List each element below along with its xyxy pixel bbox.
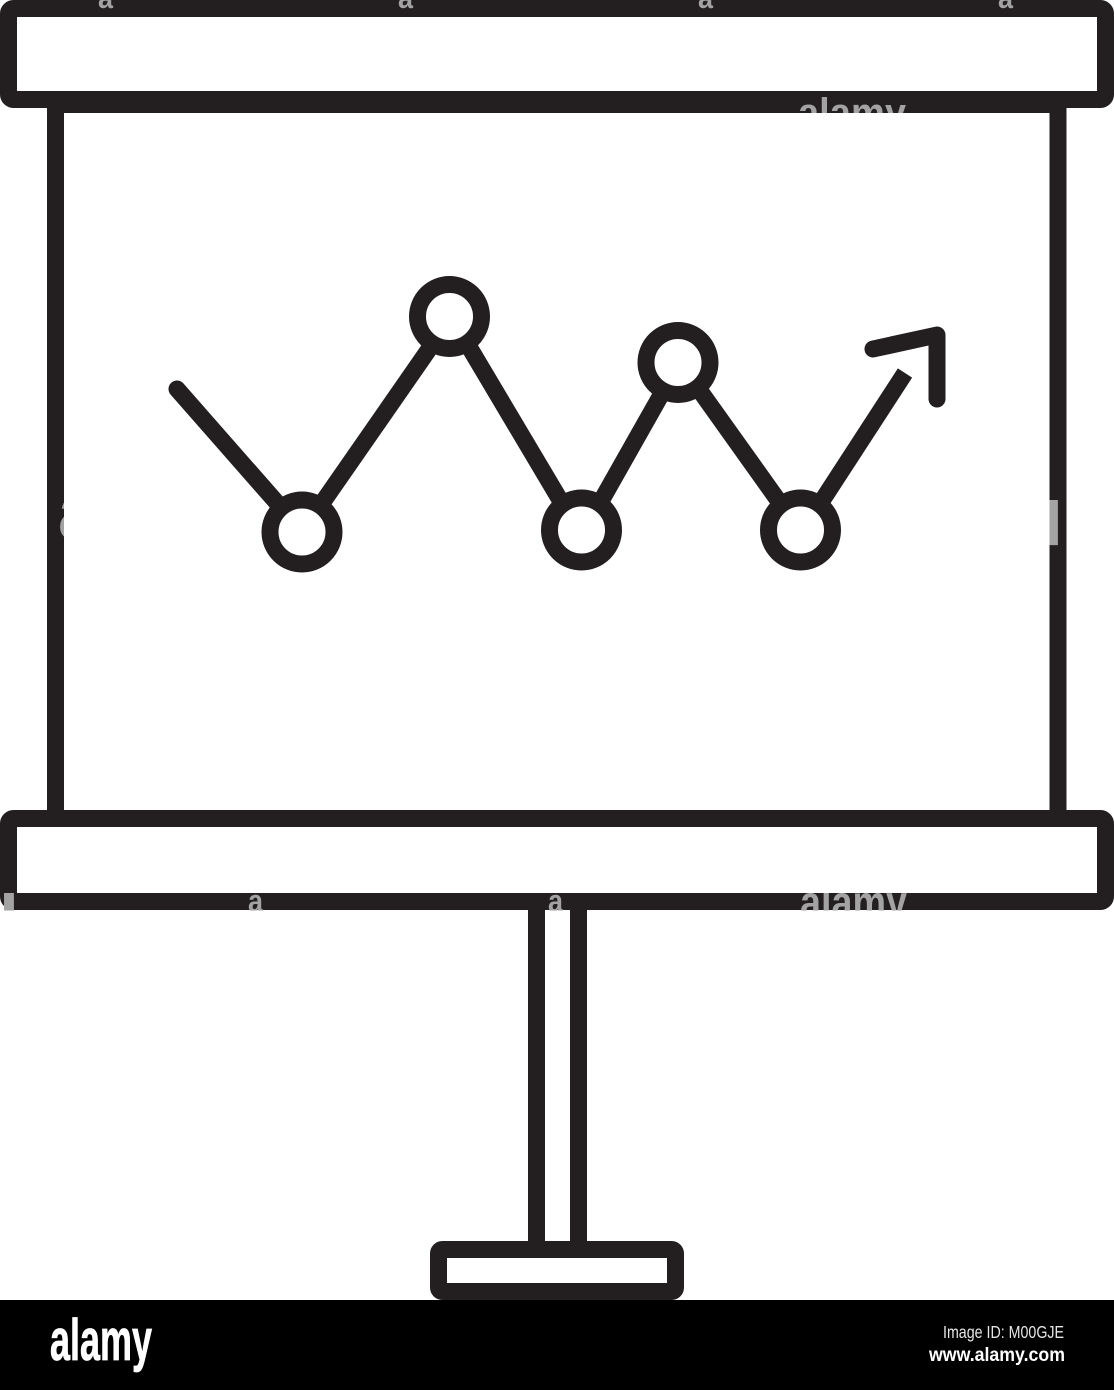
watermark remnants on the strokes: a	[248, 883, 263, 919]
data point circles	[270, 284, 832, 564]
top roller bar	[8, 8, 1106, 100]
footer image id: Image ID: M00GJE	[943, 1322, 1064, 1342]
watermark remnants on the strokes	[0, 0, 1064, 928]
watermark remnants on the strokes: a	[548, 883, 563, 919]
bottom roller bar	[8, 818, 1106, 902]
watermark remnants on the strokes: alamy	[800, 876, 907, 928]
watermark remnants on the strokes: a	[58, 467, 99, 555]
chart line segments	[177, 340, 905, 512]
line chart	[177, 284, 937, 564]
stand pole	[528, 905, 587, 1250]
footer band	[0, 1300, 1114, 1390]
watermark remnants on the strokes: alamy	[798, 91, 907, 135]
footer url: www.alamy.com	[928, 1345, 1065, 1366]
footer logo: alamy: alamy	[50, 1308, 152, 1373]
screen panel	[56, 104, 1058, 820]
arrow head	[873, 335, 937, 399]
watermark remnants on the strokes: l	[1040, 490, 1064, 559]
stand base	[438, 1250, 676, 1292]
